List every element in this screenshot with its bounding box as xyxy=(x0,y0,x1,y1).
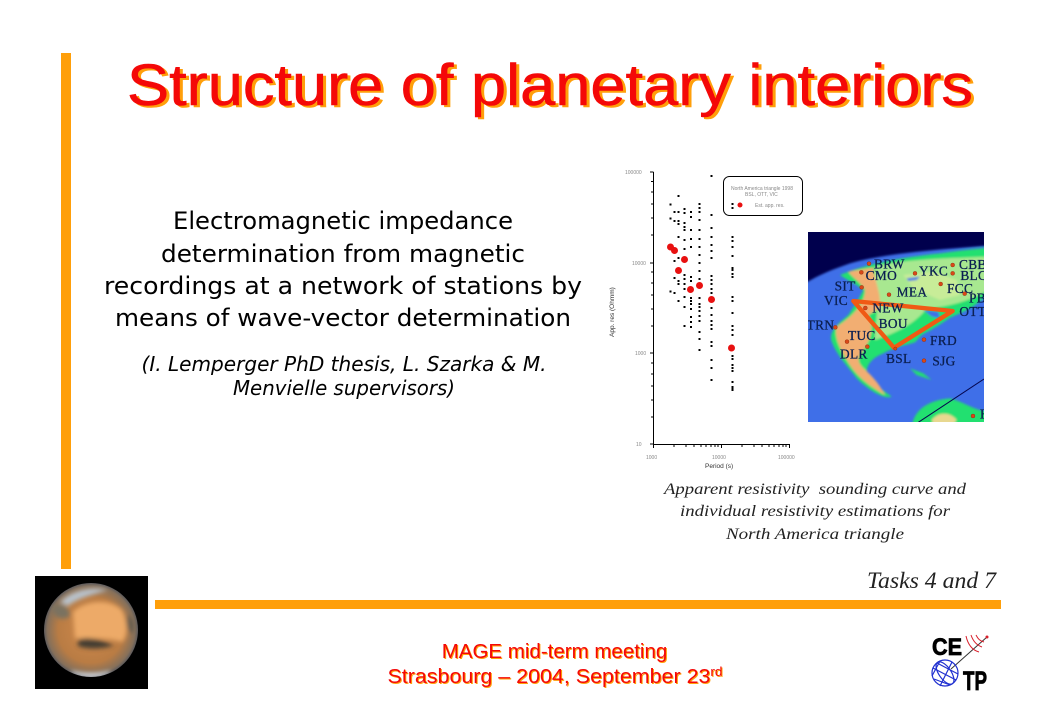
chart axis labels: 100000 xyxy=(625,170,642,176)
sounding curve points xyxy=(667,244,735,352)
horizontal orange bar xyxy=(155,600,1001,609)
chart axes xyxy=(650,172,790,448)
station markers xyxy=(833,262,975,418)
footer text: MAGE mid-term meeting xyxy=(442,640,667,663)
logo: CETP xyxy=(932,634,988,696)
land: mountains xyxy=(836,268,885,395)
land: south america xyxy=(911,397,984,422)
footer text: rd xyxy=(710,664,723,679)
footer text: Strasbourg – 2004, September 23 xyxy=(388,665,696,688)
text block: credits: (I. Lemperger PhD thesis, L. Szarka & M. xyxy=(142,352,546,376)
land: inner lowlands xyxy=(875,257,990,340)
chart axis labels xyxy=(609,170,795,470)
text block: credits: Menvielle supervisors) xyxy=(233,376,455,400)
chart axis labels: 1000 xyxy=(646,455,657,461)
station labels: CBB xyxy=(959,257,987,272)
footer text: MAGE mid-term meeting xyxy=(443,641,668,664)
map: North America station triangle xyxy=(808,232,984,422)
station labels: TUC xyxy=(848,328,876,343)
chart legend: BSL, OTT, VIC xyxy=(745,192,778,198)
chart legend: Est. app. res. xyxy=(755,203,784,209)
station labels: FCC xyxy=(947,281,973,296)
chart caption: individual resistivity estimations for xyxy=(680,503,951,520)
chart axis labels: App. res (Ohmm) xyxy=(609,287,616,337)
station labels xyxy=(807,257,990,421)
logo: CETP: CE xyxy=(932,634,962,661)
station triangle xyxy=(853,301,953,348)
text block: description: means of wave-vector determination xyxy=(115,304,571,332)
text block: description: Electromagnetic impedance xyxy=(173,207,513,235)
individual resistivity estimations xyxy=(670,175,734,391)
chart axis labels: 10000 xyxy=(712,455,726,461)
text block: description xyxy=(104,207,582,332)
station labels: MEA xyxy=(897,285,927,300)
station labels: VIC xyxy=(824,293,848,308)
chart axis labels: 100000 xyxy=(778,455,795,461)
chart caption: Apparent resistivity sounding curve and xyxy=(663,481,967,498)
station labels: H xyxy=(980,406,990,421)
station labels: TRN xyxy=(807,318,834,333)
station labels: NEW xyxy=(872,300,904,315)
great circle line xyxy=(918,379,984,422)
chart legend xyxy=(724,176,802,216)
title: Structure of planetary interiors xyxy=(127,53,973,118)
station labels: YKC xyxy=(919,263,948,278)
ocean xyxy=(808,232,984,424)
chart caption xyxy=(663,481,967,543)
logo: CETP: TP xyxy=(963,666,987,696)
title: Structure of planetary interiors xyxy=(130,55,976,120)
great lakes xyxy=(907,277,940,318)
station labels: BSL xyxy=(886,351,911,366)
station labels: SJG xyxy=(932,353,956,368)
station labels: SIT xyxy=(835,279,856,294)
chart: apparent resistivity sounding curve xyxy=(609,170,802,470)
tasks label: Tasks 4 and 7 xyxy=(867,568,998,593)
chart axis labels: 10 xyxy=(636,442,642,448)
vertical orange bar xyxy=(61,53,71,569)
chart axis labels: Period (s) xyxy=(705,463,733,470)
station labels: BRW xyxy=(874,257,905,272)
chart axis labels: 1000 xyxy=(635,351,646,357)
text block: description: determination from magnetic xyxy=(161,240,525,268)
station labels: CMO xyxy=(866,268,897,283)
chart axis labels: 10000 xyxy=(632,261,646,267)
station labels: DLR xyxy=(840,346,868,361)
footer text: Strasbourg – 2004, September 23 xyxy=(388,666,697,689)
station labels: FRD xyxy=(930,333,957,348)
station labels: BOU xyxy=(879,316,908,331)
polar sky xyxy=(808,232,984,284)
footer text xyxy=(388,640,724,689)
footer text: rd xyxy=(711,665,724,680)
chart caption: North America triangle xyxy=(725,526,904,543)
station labels: OTT xyxy=(959,304,986,319)
land mass xyxy=(831,248,990,397)
station labels: BLC xyxy=(960,268,987,283)
station labels: PB xyxy=(969,291,986,306)
text block: description: recordings at a network of stations by xyxy=(104,272,582,300)
chart legend: North America triangle 1998 xyxy=(731,186,793,192)
text block: credits xyxy=(142,352,546,400)
image: Mars xyxy=(35,576,148,689)
land: caribbean xyxy=(910,368,932,380)
